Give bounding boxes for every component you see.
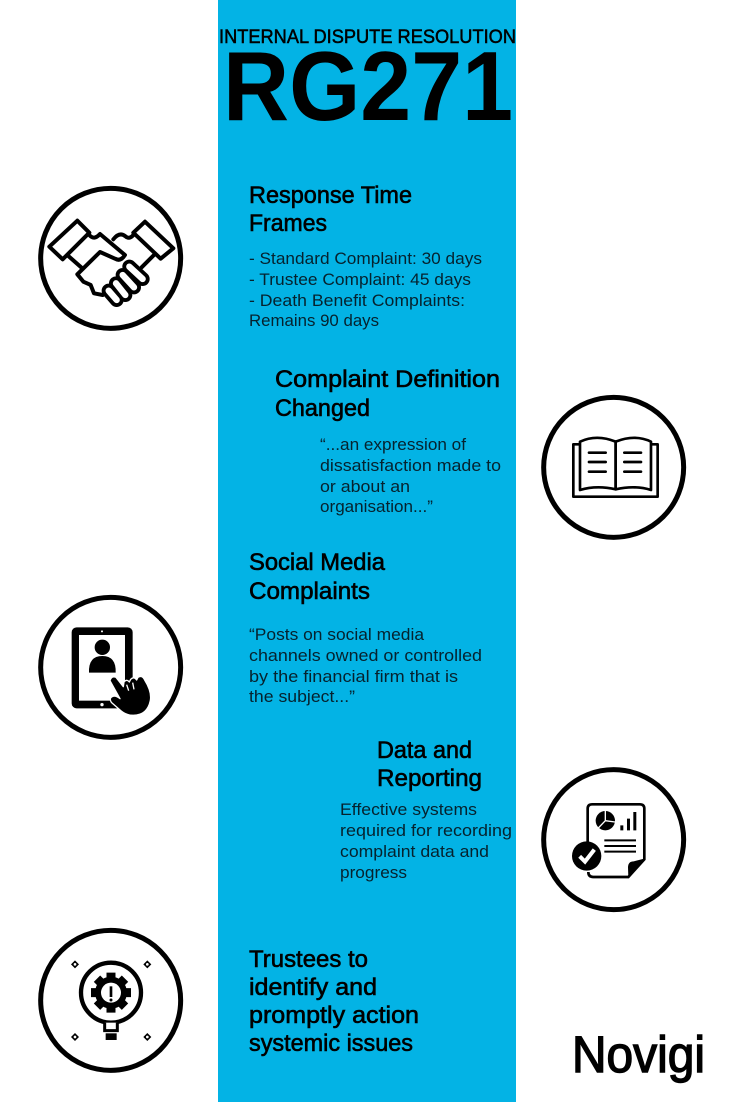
text block: or about an xyxy=(320,478,410,496)
text block xyxy=(249,626,482,706)
heading xyxy=(249,549,386,605)
icon: handshake xyxy=(41,188,181,328)
text block: channels owned or controlled xyxy=(249,647,482,665)
text block: the subject...” xyxy=(249,688,355,706)
heading: Data and xyxy=(377,737,472,764)
text block: “Posts on social media xyxy=(249,626,425,644)
icon: report document xyxy=(544,770,684,910)
heading: Changed xyxy=(275,395,370,422)
subtitle: internal dispute resolution: INTERNAL DISPUTE RESOLUTION xyxy=(219,27,516,48)
text block: Remains 90 days xyxy=(249,312,379,330)
icon: tablet with hand xyxy=(41,597,181,737)
text block: - Trustee Complaint: 45 days xyxy=(249,271,471,289)
panel: trustees systemic issues: identify and xyxy=(249,974,377,1001)
heading: Complaint Definition xyxy=(275,366,500,393)
logo: Novigi: Novigi xyxy=(572,1026,705,1083)
text block: complaint data and xyxy=(340,843,489,861)
text block: Effective systems xyxy=(340,801,477,819)
icon: open book xyxy=(544,397,684,537)
panel: trustees systemic issues: Trustees to xyxy=(249,946,368,973)
heading: Frames xyxy=(249,210,327,237)
text block xyxy=(249,250,482,330)
panel: response time frames xyxy=(249,182,482,330)
panel: trustees systemic issues: promptly action xyxy=(249,1002,419,1029)
central blue column xyxy=(218,0,516,1102)
heading: Reporting xyxy=(377,765,482,792)
text block: dissatisfaction made to xyxy=(320,457,501,475)
text block: organisation...” xyxy=(320,498,433,516)
title xyxy=(219,27,516,141)
heading xyxy=(275,366,500,422)
panel: data and reporting xyxy=(340,737,512,882)
heading: Response Time xyxy=(249,182,412,209)
text block: - Standard Complaint: 30 days xyxy=(249,250,482,268)
heading xyxy=(377,737,482,792)
panel: trustees systemic issues: systemic issues xyxy=(249,1030,413,1057)
text block xyxy=(340,801,512,882)
text block: progress xyxy=(340,864,407,882)
heading xyxy=(249,182,412,237)
main heading: RG271: RG271 xyxy=(223,31,513,141)
panel: complaint definition changed xyxy=(275,366,501,516)
panel: trustees systemic issues xyxy=(249,946,419,1057)
heading: Complaints xyxy=(249,578,370,605)
text block xyxy=(320,436,501,516)
panel: social media complaints xyxy=(249,549,482,706)
heading: Social Media xyxy=(249,549,386,576)
text block: “...an expression of xyxy=(320,436,466,454)
text block: required for recording xyxy=(340,822,512,840)
text block: by the financial firm that is xyxy=(249,668,458,686)
icon: gear lightbulb xyxy=(41,930,181,1070)
text block: - Death Benefit Complaints: xyxy=(249,292,465,310)
